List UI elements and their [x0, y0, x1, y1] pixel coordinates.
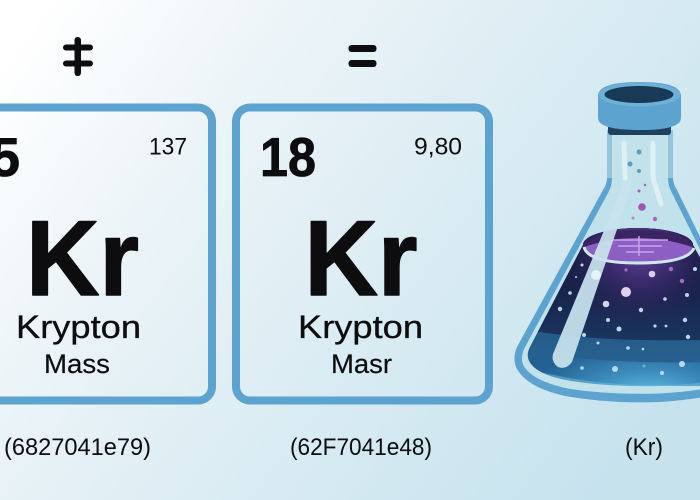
icon: equals symbol [348, 45, 376, 67]
symbol center: Kr [304, 198, 418, 318]
panel: left element card [0, 108, 212, 400]
liquid surface rim [584, 247, 694, 263]
neck collar [608, 124, 671, 135]
label center: Masr [331, 349, 392, 379]
caption center: (62F7041e48) [290, 434, 432, 461]
label left: Mass [44, 349, 110, 379]
atomic mass center: 9,80 [414, 134, 462, 160]
flask glass [522, 130, 700, 394]
icon: not-equal symbol [63, 37, 93, 76]
atomic mass left: 137 [149, 134, 187, 160]
name left: Krypton [16, 309, 141, 345]
glass rod [553, 180, 632, 368]
panel: center element card [236, 108, 489, 400]
liquid [528, 228, 700, 386]
flask outer wall [514, 130, 700, 402]
name center: Krypton [298, 309, 423, 345]
bubbles [558, 150, 697, 375]
liquid surface [583, 230, 693, 264]
cap opening [604, 86, 674, 103]
atomic number center: 18 [260, 126, 316, 188]
cap [598, 82, 681, 130]
flask neck wall tint [607, 130, 673, 178]
caption left: (6827041e79) [4, 434, 151, 461]
icon: flask [510, 82, 700, 402]
caption right: (Kr) [625, 434, 663, 461]
neck highlights [624, 143, 661, 204]
symbol left: Kr [26, 198, 139, 318]
